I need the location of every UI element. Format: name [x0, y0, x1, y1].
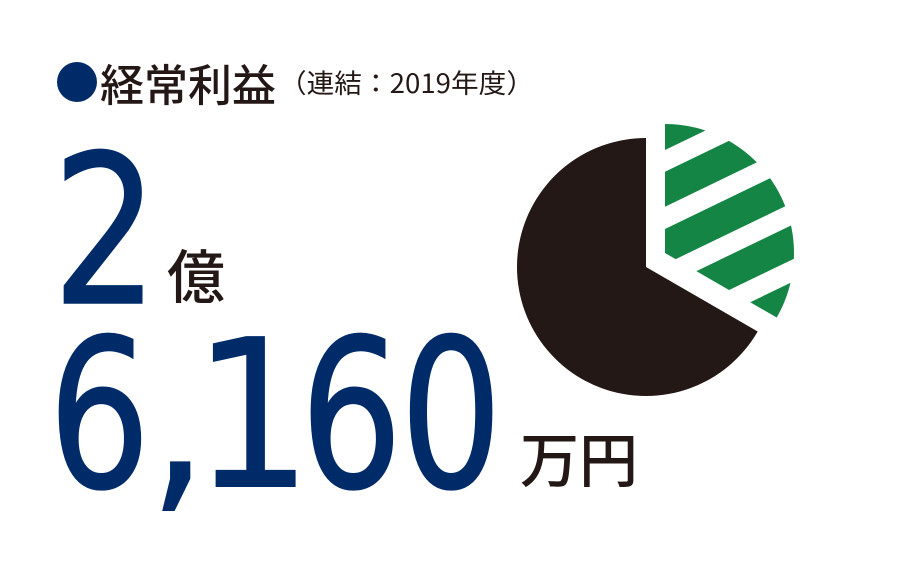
pie chart [517, 124, 794, 396]
number 2: 2 [52, 112, 159, 352]
dark slice [517, 138, 758, 396]
infographic canvas [57, 62, 794, 511]
unit 万円: 万円 [520, 414, 638, 499]
number 6,160: , [147, 295, 210, 536]
value: 6,160万円 [48, 294, 638, 536]
value: 2億 [52, 112, 225, 352]
striped green slice [665, 124, 794, 318]
heading [57, 50, 534, 114]
unit 億: 億 [167, 231, 225, 315]
number 6,160: 1 [192, 294, 313, 536]
icon: navy bullet [57, 62, 97, 102]
subtitle: （連結：2019年度） [279, 62, 534, 101]
number 6,160: 660 [48, 295, 503, 536]
title: 経常利益 [100, 50, 276, 114]
